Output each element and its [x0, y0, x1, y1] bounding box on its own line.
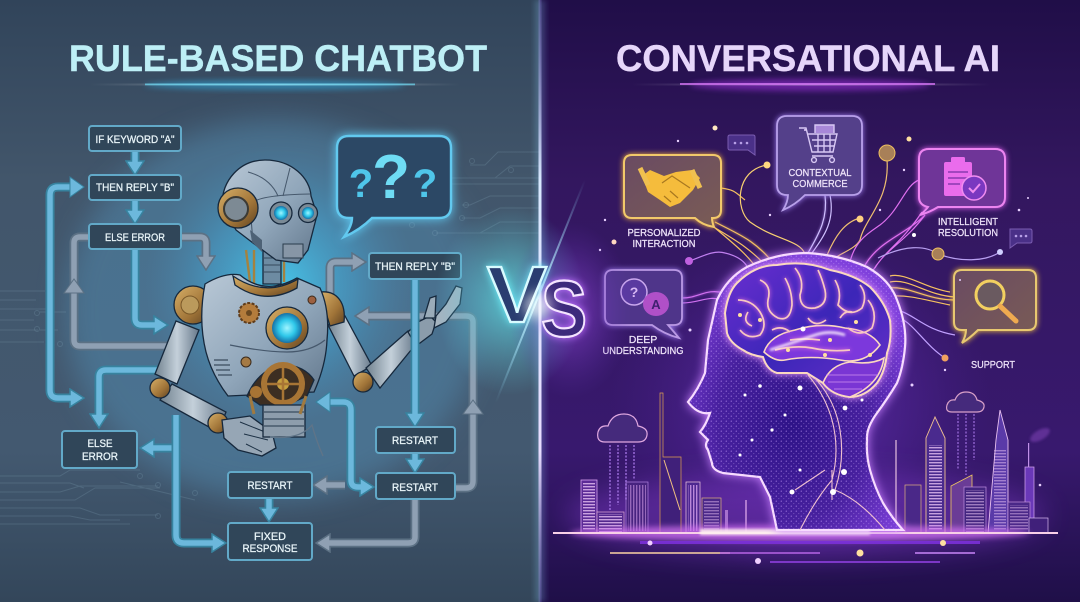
small chest gear	[239, 303, 259, 323]
arrow: blue from restart to robot and restart	[316, 392, 362, 487]
robot	[150, 160, 462, 456]
icon: handshake	[640, 168, 700, 207]
robot eyes	[270, 202, 318, 224]
callout: contextual commerce: CONTEXTUAL	[788, 167, 852, 179]
circuit traces: left	[0, 291, 198, 524]
arrow: then reply down to restart	[410, 279, 420, 415]
callout: support: SUPPORT	[971, 359, 1016, 371]
arrow: to else error box	[152, 444, 175, 452]
box: restart middle: RESTART	[248, 480, 293, 492]
robot right arm	[328, 286, 462, 392]
circuit traces: right	[410, 152, 540, 236]
robot mouth	[283, 244, 303, 258]
box: fixed response	[228, 523, 312, 560]
callout: deep understanding: DEEP	[629, 334, 657, 346]
flare at VS centre	[525, 293, 551, 319]
speech bubble with question marks: ?	[413, 162, 437, 206]
smudge top right of skyline	[1028, 425, 1052, 445]
text: v: V	[487, 250, 547, 339]
arrow: down to fixed response	[176, 415, 214, 543]
sparkle nodes	[738, 384, 864, 495]
divider line	[535, 0, 545, 602]
title: rule-based chatbot: RULE-BASED CHATBOT	[69, 37, 487, 79]
particles	[599, 126, 1041, 486]
callout: intelligent resolution: INTELLIGENT	[938, 216, 999, 228]
panel: conversational AI	[540, 0, 1080, 602]
callout: personalized interaction	[624, 155, 721, 250]
box: then reply b	[89, 175, 181, 200]
icon: magnifying glass	[976, 281, 1016, 321]
arrow: grey left loop	[64, 237, 168, 346]
robot torso	[202, 274, 328, 406]
skyline	[581, 392, 1048, 533]
speech bubble with question marks: ?	[372, 143, 410, 212]
icon: cloud left	[598, 414, 647, 510]
lightning streak	[496, 180, 585, 402]
spinal cord and neck nerves	[795, 375, 885, 530]
box: then reply b right	[369, 253, 461, 279]
box: else error lower: ELSE	[88, 438, 112, 450]
arrow: else error down to robot	[135, 249, 156, 325]
box: if keyword a	[89, 126, 181, 151]
icon: question and answer bubbles: A	[651, 297, 661, 312]
box: restart middle	[228, 472, 312, 498]
arrow: grey loop to then reply right	[330, 262, 354, 295]
icon: typing bubble top	[728, 135, 755, 155]
title: conversational ai: CONVERSATIONAL AI	[616, 37, 1000, 79]
robot neck	[246, 250, 284, 284]
robot shoulders	[174, 286, 344, 346]
icon: question and answer bubbles: ?	[630, 284, 638, 300]
icon: cloud right	[947, 392, 984, 475]
callout: deep understanding: UNDERSTANDING	[602, 345, 684, 357]
box: then reply b right: THEN REPLY "B"	[375, 261, 455, 273]
vs divider	[435, 0, 632, 602]
box: then reply b: THEN REPLY "B"	[96, 182, 174, 194]
box: restart lower right	[376, 473, 455, 499]
panel: rule-based chatbot	[0, 0, 540, 602]
flow arrows behind robot	[50, 151, 483, 543]
arrow: else error right grey	[181, 237, 206, 258]
arrow: reply down	[130, 199, 140, 212]
chest reactor	[266, 307, 308, 349]
speech bubble with question marks	[337, 136, 451, 237]
arrow: grey restart to fixed response	[328, 499, 415, 543]
callout: deep understanding	[602, 270, 684, 357]
callout: personalized interaction: INTERACTION	[632, 238, 696, 250]
robot ear	[218, 188, 258, 228]
box: if keyword a: IF KEYWORD "A"	[96, 134, 175, 146]
brain folds	[738, 268, 874, 351]
callout: intelligent resolution	[919, 149, 1005, 239]
arrow: restart to restart	[410, 453, 420, 461]
brain	[725, 263, 891, 397]
box: restart lower right: RESTART	[392, 482, 438, 494]
box: else error lower: ERROR	[82, 451, 118, 463]
arrow: robot to lower else error	[99, 370, 160, 416]
text: s: S	[541, 264, 587, 353]
icon: typing bubble right	[1010, 229, 1032, 248]
box: fixed response: FIXED	[254, 531, 286, 543]
box: restart top right	[376, 427, 455, 453]
callout: contextual commerce	[777, 116, 862, 210]
head silhouette	[688, 253, 905, 530]
callout: personalized interaction: PERSONALIZED	[628, 227, 701, 239]
callout: intelligent resolution: RESOLUTION	[938, 227, 998, 239]
arrow: keyword down	[130, 151, 140, 163]
box: else error lower	[62, 431, 137, 468]
box: fixed response: RESPONSE	[242, 543, 298, 555]
icon: question and answer bubbles	[621, 279, 669, 316]
robot head	[218, 160, 318, 263]
box: else error	[89, 224, 181, 249]
box: else error: ELSE ERROR	[105, 232, 165, 244]
icon: clipboard check	[944, 157, 986, 200]
arrow: then reply to else error outer loop	[50, 177, 84, 398]
speech bubble with question marks: ?	[349, 162, 373, 206]
arrow: grey feedback right column	[367, 316, 483, 488]
robot left arm	[150, 321, 276, 456]
arrow: grey restart left	[325, 480, 345, 490]
icon: shopping cart	[799, 125, 837, 162]
robot waist	[250, 396, 323, 456]
neural wires	[682, 145, 1003, 362]
box: restart top right: RESTART	[392, 435, 438, 447]
arrow: restart to fixed response	[264, 498, 274, 510]
gear cavity	[247, 364, 314, 406]
callout: contextual commerce: COMMERCE	[792, 178, 848, 190]
ground glow lines	[553, 525, 1058, 564]
callout: support	[954, 270, 1036, 371]
